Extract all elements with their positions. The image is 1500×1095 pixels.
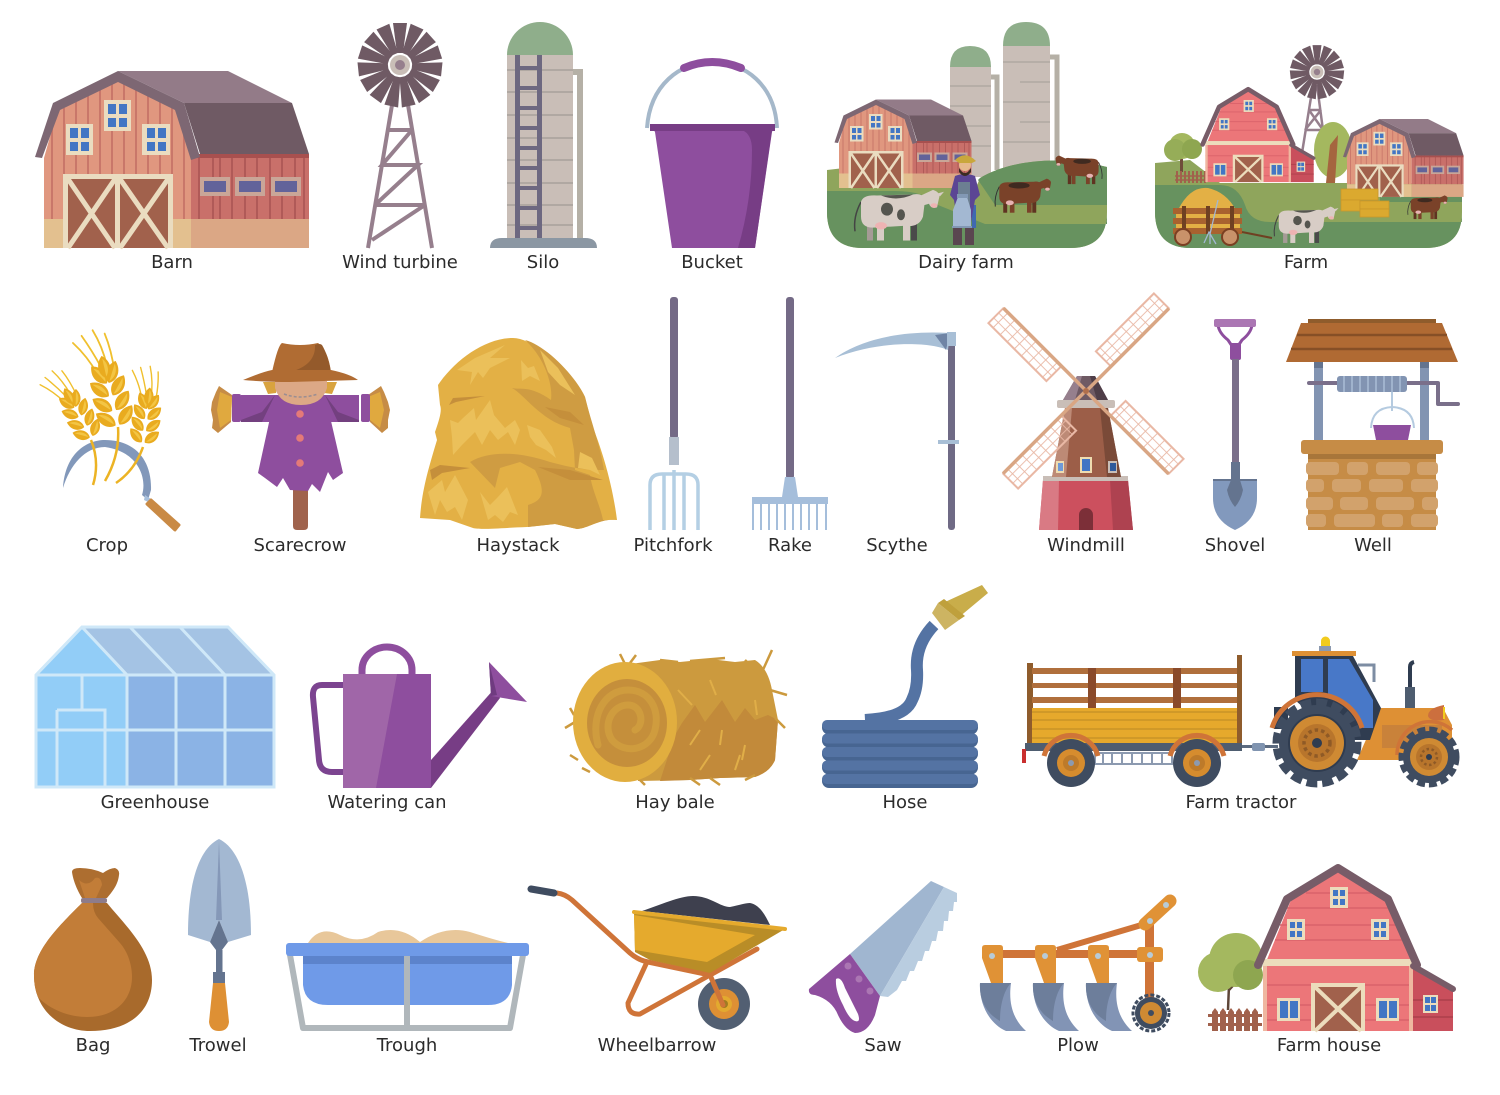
label: Dairy farm: Dairy farm	[918, 252, 1014, 273]
label: Haystack: Haystack	[476, 535, 560, 556]
label: Wheelbarrow: Wheelbarrow	[598, 1035, 716, 1056]
icon: pitchfork	[650, 297, 698, 530]
icon: scarecrow	[211, 343, 390, 530]
label: Trough: Trough	[376, 1035, 437, 1056]
icon: hose	[822, 585, 988, 788]
label: Greenhouse: Greenhouse	[101, 792, 209, 813]
icon: bag	[34, 868, 152, 1031]
icon: dairy farm	[827, 22, 1107, 248]
straw hands	[211, 386, 390, 433]
label: Farm: Farm	[1284, 252, 1328, 273]
farmer	[950, 155, 980, 245]
label: Crop: Crop	[86, 535, 128, 556]
icon: wheelbarrow	[531, 889, 785, 1030]
label: Bucket: Bucket	[681, 252, 743, 273]
icon: hay bale	[565, 650, 787, 785]
hay cart	[1173, 188, 1272, 245]
label: Barn: Barn	[151, 252, 193, 273]
icon: farm	[1155, 45, 1464, 248]
front wheel	[1397, 722, 1457, 785]
label: Wind turbine: Wind turbine	[342, 252, 458, 273]
icon: silo	[490, 22, 597, 248]
label: Trowel: Trowel	[188, 1035, 247, 1056]
label: Hay bale: Hay bale	[635, 792, 715, 813]
icon: windmill	[988, 293, 1184, 530]
icon: rake	[752, 297, 828, 530]
icon: haystack	[420, 338, 617, 529]
label: Plow: Plow	[1057, 1035, 1099, 1056]
rear wheel	[1272, 695, 1362, 784]
label: Farm house: Farm house	[1277, 1035, 1381, 1056]
icon: plow	[980, 901, 1170, 1031]
icon: farm house	[1198, 868, 1453, 1031]
label: Saw: Saw	[864, 1035, 902, 1056]
tractor body	[1274, 636, 1452, 760]
icon: saw	[809, 881, 957, 1033]
icon: trough	[286, 930, 529, 1028]
cows	[1274, 207, 1339, 243]
label: Farm tractor: Farm tractor	[1186, 792, 1297, 813]
label: Pitchfork: Pitchfork	[634, 535, 713, 556]
icon: crop	[37, 324, 179, 530]
fence	[1208, 1008, 1262, 1031]
icon: scythe	[835, 332, 959, 530]
label: Rake: Rake	[768, 535, 812, 556]
icon: bucket	[647, 62, 777, 248]
cows	[855, 190, 944, 241]
icon: greenhouse	[36, 627, 275, 787]
label: Scarecrow: Scarecrow	[253, 535, 347, 556]
icon: wind turbine	[357, 23, 443, 248]
label: Watering can: Watering can	[327, 792, 447, 813]
label: Well: Well	[1354, 535, 1392, 556]
icon: barn	[35, 71, 309, 248]
icon: farm tractor	[1022, 636, 1457, 787]
icon: well	[1286, 319, 1458, 530]
label: Windmill: Windmill	[1047, 535, 1125, 556]
label: Bag: Bag	[76, 1035, 110, 1056]
label: Scythe: Scythe	[866, 535, 928, 556]
icon: shovel	[1213, 319, 1257, 530]
label: Silo: Silo	[527, 252, 559, 273]
ground	[1155, 160, 1462, 248]
icon: trowel	[188, 839, 251, 1031]
label: Hose: Hose	[882, 792, 928, 813]
tree	[1198, 933, 1263, 1010]
silos	[950, 22, 1057, 177]
label: Shovel: Shovel	[1205, 535, 1265, 556]
icon: watering can	[313, 647, 527, 788]
windmill	[1290, 45, 1344, 153]
trees	[1164, 122, 1352, 183]
hay bales	[1341, 189, 1389, 217]
trailer	[1022, 655, 1278, 787]
ground	[827, 160, 1107, 248]
milk can	[952, 194, 972, 228]
